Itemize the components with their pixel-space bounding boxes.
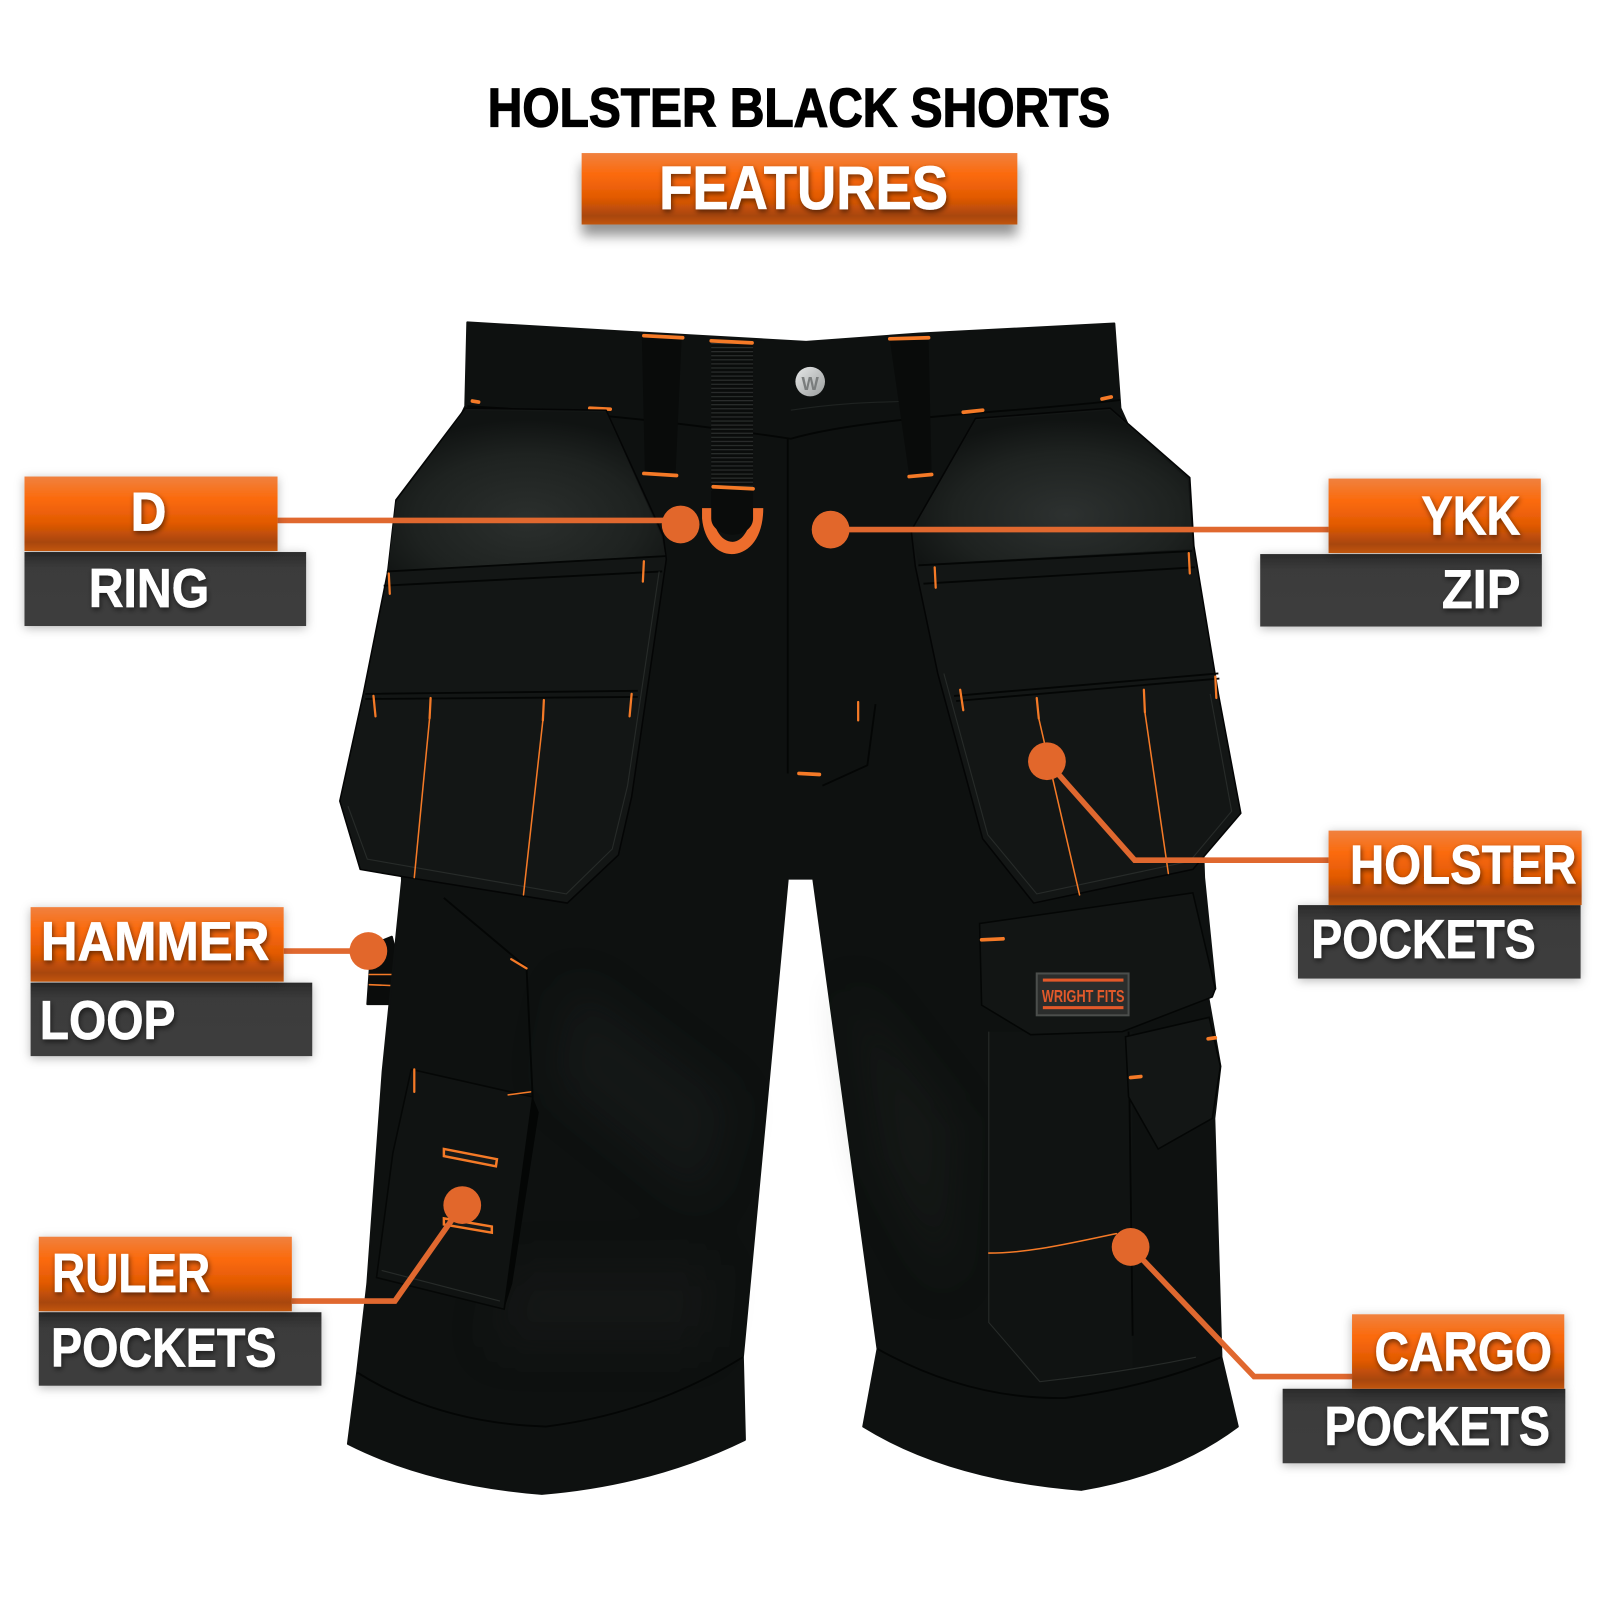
- callout: holster pockets: [1028, 742, 1582, 979]
- webbing strap and D ring: [702, 341, 763, 554]
- metal button: W: [802, 373, 820, 394]
- callout: cargo pockets: CARGO: [1374, 1320, 1552, 1382]
- fabric folds: [490, 980, 959, 1347]
- brand patch: [1037, 973, 1129, 1015]
- callout: D ring: [24, 477, 699, 626]
- callout: D ring: D: [131, 481, 166, 543]
- waistband: [467, 336, 1120, 477]
- callout: YKK zip: YKK: [1421, 485, 1521, 547]
- callout: YKK zip: [812, 479, 1542, 627]
- brand patch: WRIGHT FITS: [1042, 986, 1124, 1006]
- callout: hammer loop: LOOP: [40, 989, 176, 1051]
- shorts illustration: [340, 322, 1241, 1494]
- right holster pocket: [911, 408, 1241, 903]
- features banner: FEATURES: [659, 154, 948, 222]
- callout: ruler pockets: RULER: [52, 1242, 210, 1304]
- callout: hammer loop: HAMMER: [41, 910, 269, 972]
- hammer loop: [367, 937, 400, 1004]
- callout: YKK zip: ZIP: [1442, 558, 1520, 620]
- garment body: [348, 322, 1238, 1494]
- right cargo pocket: [980, 893, 1220, 1382]
- left cargo ruler pocket: [377, 898, 539, 1309]
- fly stitching: [788, 439, 876, 786]
- callout: hammer loop: [31, 907, 387, 1056]
- callout: cargo pockets: POCKETS: [1324, 1395, 1550, 1457]
- callout: ruler pockets: [39, 1186, 481, 1386]
- callout: cargo pockets: [1112, 1228, 1565, 1463]
- callout: holster pockets: POCKETS: [1311, 908, 1536, 970]
- metal button: [795, 367, 825, 396]
- leg hems: [357, 1349, 1221, 1427]
- left holster pocket: [340, 408, 666, 903]
- callout: ruler pockets: POCKETS: [51, 1316, 277, 1378]
- title: HOLSTER BLACK SHORTS: [488, 77, 1110, 139]
- callout: D ring: RING: [89, 557, 209, 619]
